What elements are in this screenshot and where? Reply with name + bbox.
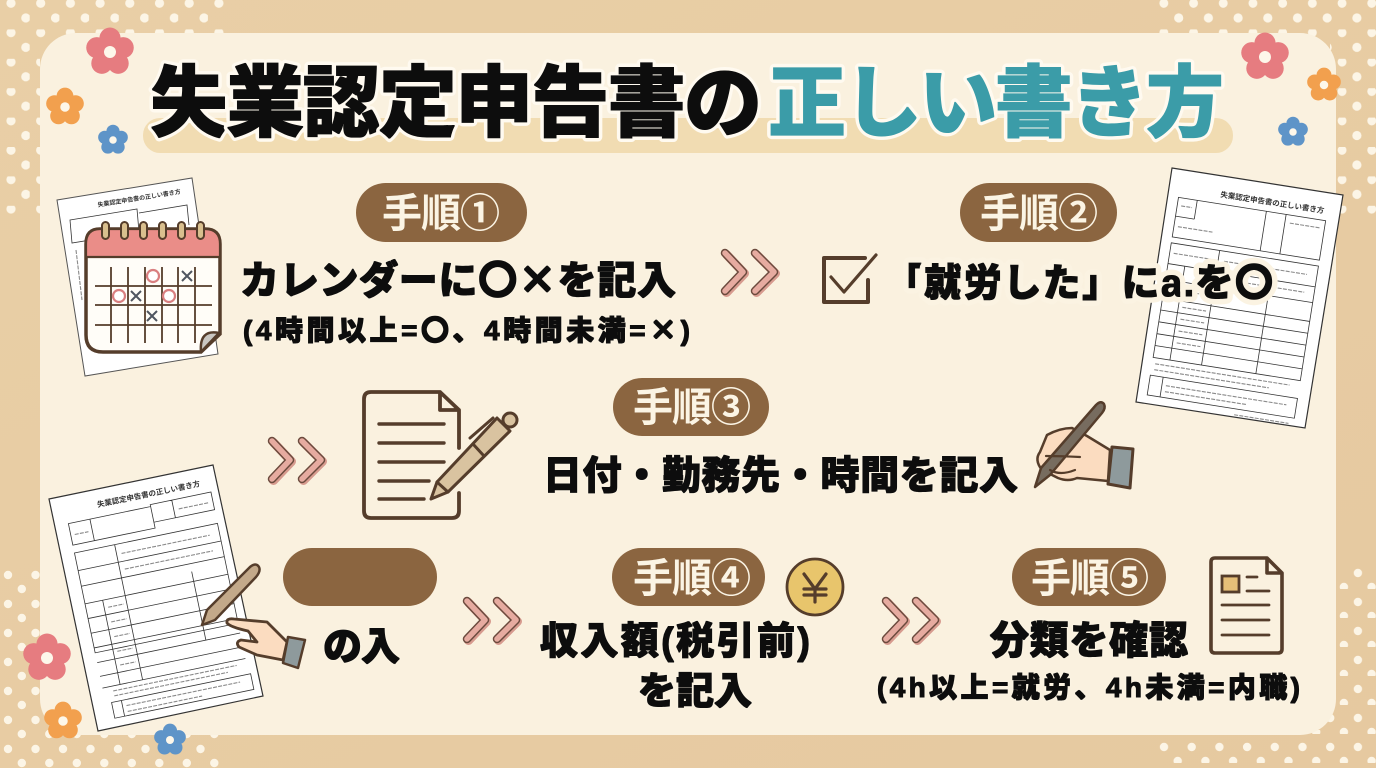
step 3 badge bbox=[613, 378, 769, 436]
icon: classification document bbox=[1211, 558, 1282, 653]
step 1 text: カレンダーに〇×を記入 bbox=[240, 250, 676, 306]
icon: pointing hand and pen bbox=[202, 564, 305, 668]
step 1 badge bbox=[356, 183, 527, 242]
step 1 text bbox=[240, 250, 690, 349]
step 5 text: (4h以上=就労、4h未満=内職) bbox=[877, 672, 1300, 703]
form sheet: bottom left: 失業認定申告書の正しい書き方 bbox=[96, 478, 201, 509]
icon: yen coin bbox=[787, 559, 843, 615]
title underline band bbox=[143, 118, 1233, 153]
step 4 badge: 手順④ bbox=[633, 557, 751, 601]
title: 失業認定申告書の bbox=[150, 59, 762, 147]
form sheet: top right bbox=[1136, 168, 1343, 428]
icon: document and pen bbox=[364, 392, 517, 518]
form sheet: behind calendar bbox=[57, 178, 218, 376]
step 2 badge: 手順② bbox=[980, 192, 1098, 236]
step 4 text bbox=[540, 621, 810, 713]
step 4 text: を記入 bbox=[638, 671, 752, 713]
icon: writing hand bbox=[1035, 402, 1133, 488]
step 5 badge bbox=[1012, 548, 1166, 606]
flowers: bottom left bbox=[23, 634, 186, 755]
arrow: to step 4 bbox=[467, 601, 518, 640]
arrow: into step 3 bbox=[272, 441, 322, 480]
step 3 badge: 手順③ bbox=[633, 386, 751, 430]
form sheet: behind calendar: 失業認定申告書の正しい書き方 bbox=[97, 188, 181, 209]
blank brown badge bbox=[283, 548, 437, 606]
step 3 text: 日付・勤務先・時間を記入 bbox=[543, 455, 1018, 498]
arrow: to step 5 bbox=[886, 601, 936, 640]
step 2 text: 「就労した」にa.を〇 bbox=[885, 263, 1273, 305]
icon: checkbox bbox=[824, 255, 876, 302]
flowers: top left bbox=[46, 28, 134, 154]
title: 正しい書き方 bbox=[768, 59, 1224, 147]
arrow: step 1 to 2 bbox=[725, 253, 776, 292]
icon: calendar bbox=[86, 222, 220, 352]
form sheet: top right: 失業認定申告書の正しい書き方 bbox=[1220, 189, 1326, 215]
step 5 text: 分類を確認 bbox=[990, 620, 1188, 663]
step 5 text bbox=[877, 620, 1300, 703]
step 5 badge: 手順⑤ bbox=[1031, 557, 1149, 601]
title bbox=[150, 59, 1224, 147]
step text: の入: の入 bbox=[323, 626, 400, 669]
flowers: top right bbox=[1241, 33, 1341, 146]
step 2 badge bbox=[960, 183, 1117, 242]
step 1 text: (4時間以上=〇、4時間未満=×) bbox=[243, 309, 690, 349]
step 4 text: 収入額(税引前) bbox=[540, 621, 810, 663]
step 1 badge: 手順① bbox=[382, 192, 500, 236]
step 4 badge bbox=[612, 548, 765, 606]
form sheet: bottom left bbox=[49, 465, 263, 731]
